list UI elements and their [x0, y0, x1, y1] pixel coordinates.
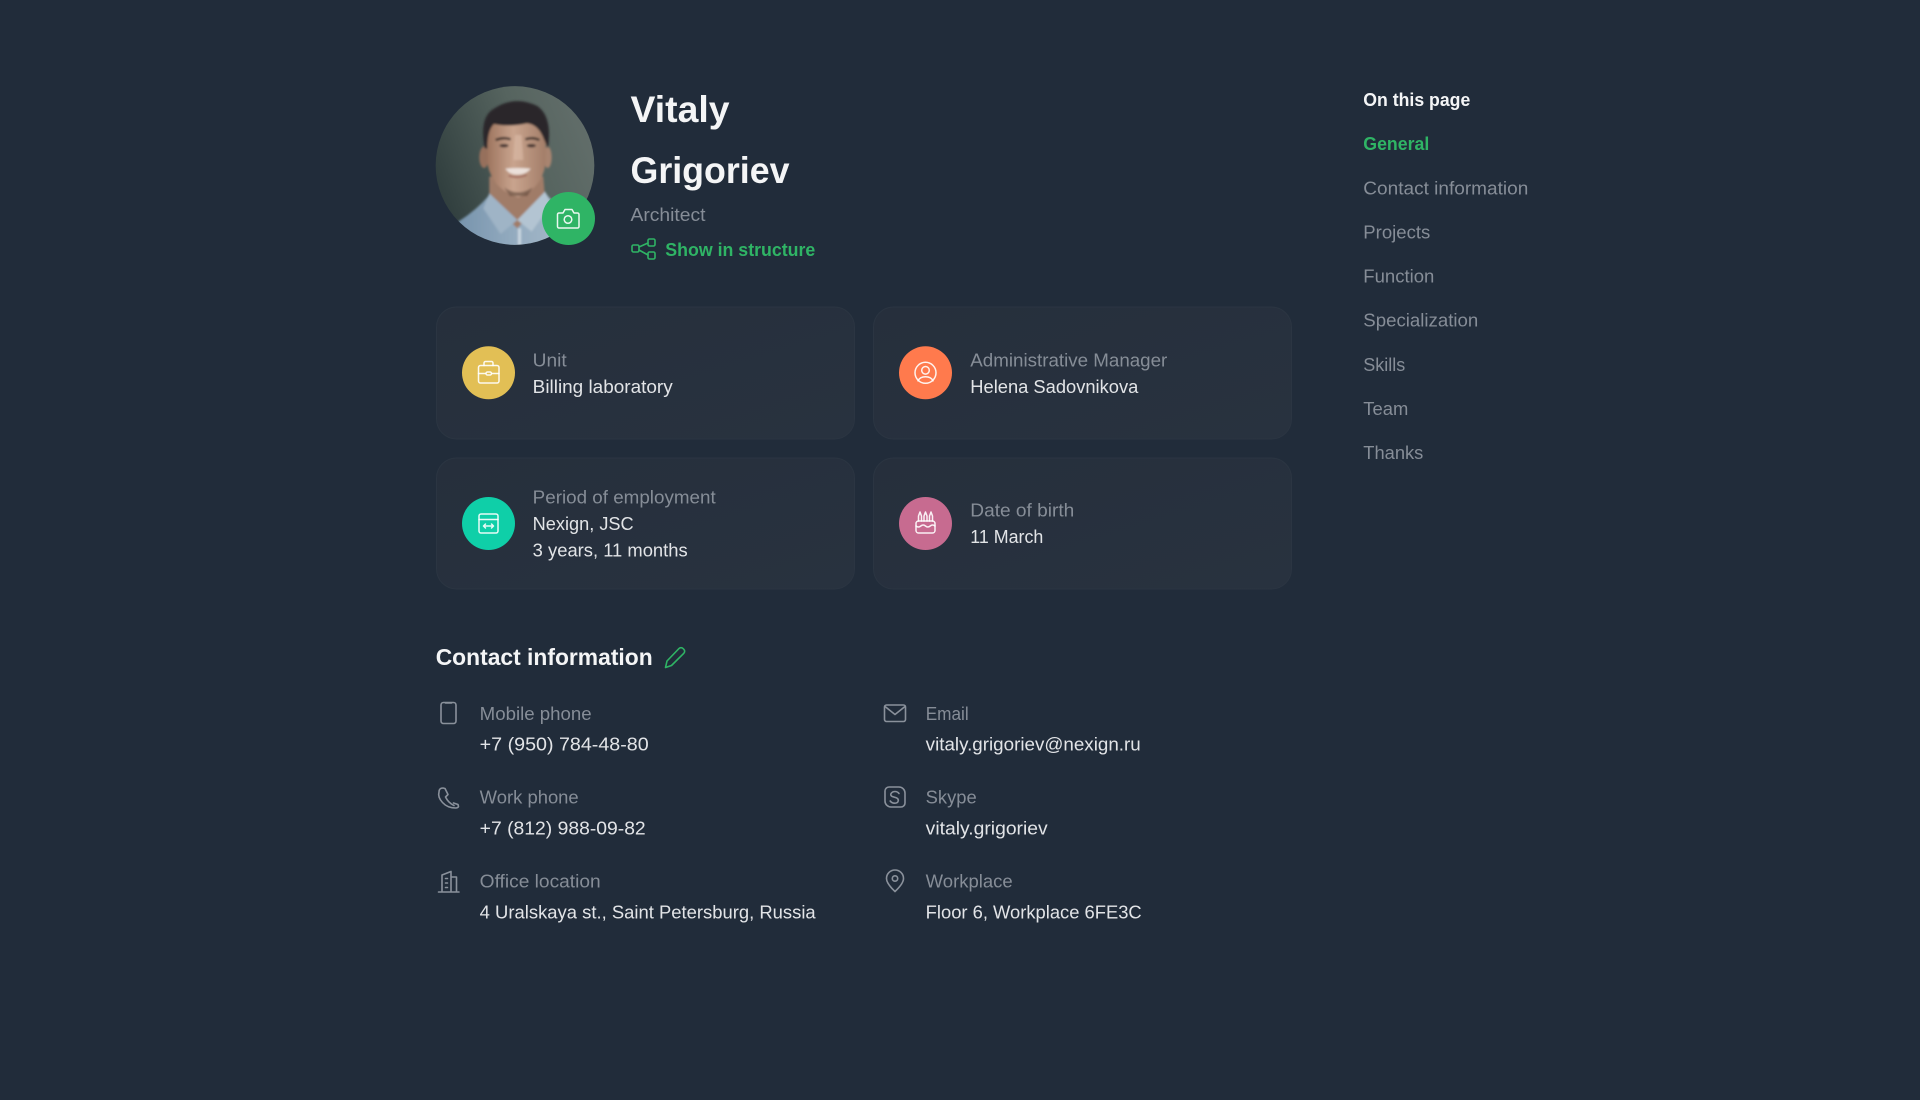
birth date text	[970, 501, 1074, 547]
navigation heading: On this page	[1363, 90, 1470, 110]
unit text	[533, 350, 673, 397]
nav item: thanks: Thanks	[1363, 443, 1423, 463]
avatar photo	[436, 86, 594, 245]
unit text: Billing laboratory	[533, 377, 673, 397]
icon: map pin	[886, 870, 904, 892]
employment text: Period of employment	[533, 487, 716, 507]
contact: office location: 4 Uralskaya st., Saint Petersburg, Russia	[480, 902, 817, 922]
manager text: Helena Sadovnikova	[970, 377, 1139, 397]
contact: workplace: Workplace	[926, 872, 1013, 892]
contact: skype: vitaly.grigoriev	[926, 818, 1048, 838]
nav item: skills: Skills	[1363, 355, 1405, 375]
contact: work phone: Work phone	[480, 788, 579, 808]
job title: Architect	[630, 205, 706, 225]
panel: administrative manager card	[874, 307, 1292, 439]
contact: work phone: +7 (812) 988-09-82	[480, 818, 646, 838]
icon: calendar range	[462, 497, 515, 550]
icon: mobile	[441, 702, 456, 724]
show in structure link: Show in structure	[665, 240, 815, 260]
icon: building	[438, 872, 459, 892]
contact: workplace: Floor 6, Workplace 6FE3C	[926, 902, 1142, 922]
contact: skype	[885, 787, 1048, 838]
contact: email	[884, 704, 1141, 754]
icon: pencil	[666, 648, 685, 668]
contact: mobile phone: +7 (950) 784-48-80	[480, 734, 649, 754]
contact information heading: Contact information	[436, 644, 653, 670]
camera badge	[542, 192, 595, 245]
panel: date of birth card	[874, 458, 1292, 589]
panel: on this page navigation	[1363, 90, 1528, 463]
contact: office location	[438, 872, 817, 922]
panel: unit card	[436, 307, 854, 439]
profile header	[430, 80, 815, 260]
employment text	[533, 487, 716, 561]
contact: email: Email	[926, 704, 969, 724]
nav item: specialization: Specialization	[1363, 311, 1478, 331]
employment text: 3 years, 11 months	[533, 541, 688, 561]
icon: briefcase	[462, 346, 515, 399]
contact: mobile phone: Mobile phone	[480, 704, 592, 724]
contact: workplace	[886, 870, 1142, 922]
employment text: Nexign, JSC	[533, 514, 634, 534]
icon: structure	[632, 239, 655, 259]
name: Grigoriev	[630, 150, 790, 191]
contact: skype: Skype	[926, 788, 977, 808]
nav item: team: Team	[1363, 399, 1408, 419]
unit text: Unit	[533, 350, 567, 370]
panel: period of employment card	[436, 458, 854, 589]
icon: birthday cake	[899, 497, 952, 550]
contact: mobile phone	[441, 702, 649, 754]
contact: email: vitaly.grigoriev@nexign.ru	[926, 734, 1141, 754]
manager text: Administrative Manager	[970, 350, 1167, 370]
icon: skype	[885, 787, 905, 807]
contact: work phone	[439, 788, 646, 838]
birth date text: 11 March	[970, 527, 1043, 547]
icon: user	[899, 346, 952, 399]
nav item: contact information: Contact information	[1363, 178, 1528, 198]
name	[630, 89, 790, 191]
profile page	[436, 86, 1528, 922]
icon: phone handset	[439, 788, 458, 808]
nav item: function: Function	[1363, 267, 1434, 287]
nav item: general (active): General	[1363, 134, 1429, 154]
contact: office location: Office location	[480, 872, 601, 892]
nav item: projects: Projects	[1363, 222, 1430, 242]
name: Vitaly	[630, 89, 730, 130]
manager text	[970, 350, 1167, 397]
birth date text: Date of birth	[970, 501, 1074, 521]
icon: envelope	[884, 705, 906, 722]
